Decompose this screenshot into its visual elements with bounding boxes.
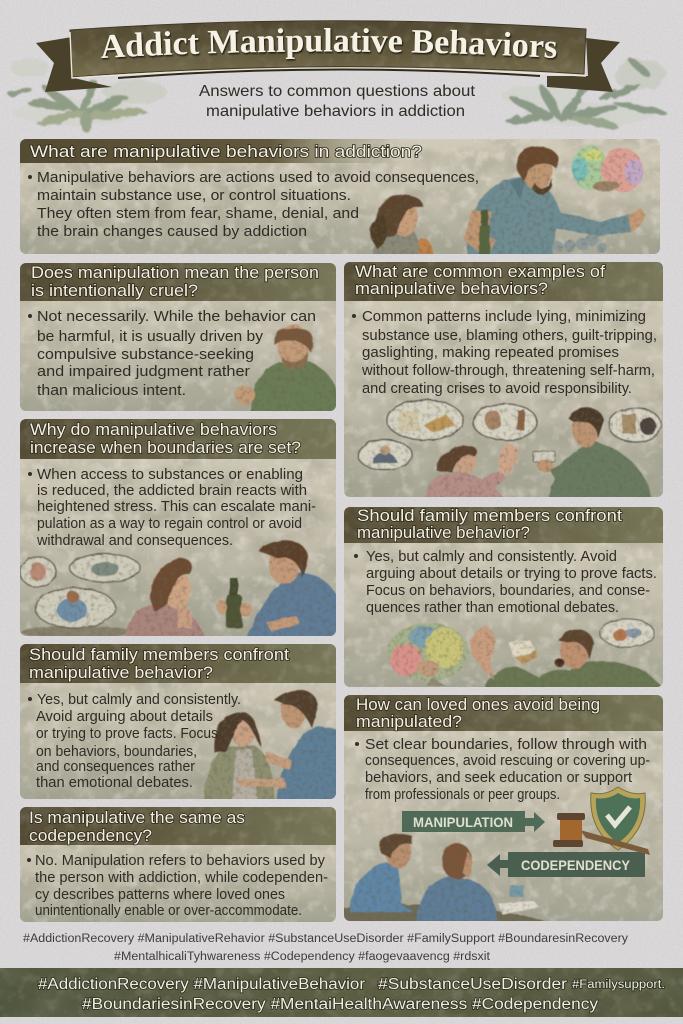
body text: pulation as a way to regain control or avoid [37,516,302,532]
icon: gavel [553,813,650,855]
illustration: two men watching [344,833,546,921]
subtitle [199,83,476,120]
panel: boundaries are set [20,419,340,640]
panel: common examples [344,262,663,502]
hashtags: plain lines: #AddictionRecovery #ManipulativeRehavior #SubstanceUseDisorder #FamilySupport #BoundaresinRecovery [23,933,628,945]
header: manipulative behavior? [357,523,530,542]
body text: Set clear boundaries, follow through with [365,737,647,753]
body text: Yes, but calmly and consistently. Avoid [366,549,617,565]
header: is intentionally cruel? [31,281,198,300]
header: What are manipulative behaviors in addiction? [30,142,422,161]
body text [27,853,328,919]
panel: codependency [20,807,336,922]
body text [352,309,657,397]
tag: codependency [487,852,645,877]
body text: Not necessarily. While the behavior can [37,309,316,325]
body text: Yes, but calmly and consistently. [37,692,241,708]
header: manipulative behavior? [29,663,213,682]
foliage: left [8,59,167,132]
body text: maintain substance use, or control situations. [37,188,351,204]
header [20,139,500,163]
body text: and consequences rather [36,759,195,775]
body text: and impaired judgment rather [37,364,250,380]
header: Should family members confront [357,506,622,525]
header: What are common examples of [355,262,605,281]
bottom hashtag bar [0,968,683,1017]
body text [354,549,657,616]
body text: quences rather than emotional debates. [366,600,619,616]
header [344,506,663,543]
body text [28,309,316,399]
body text: Focus on behaviors, boundaries, and conse- [366,583,650,599]
header [20,419,336,459]
banner white edge [70,32,586,78]
tag: manipulation: MANIPULATION [413,814,513,830]
hashtags: plain lines [23,933,628,963]
body text: Common patterns include lying, minimizing [362,309,646,325]
body text: They often stem from fear, shame, denial, and [37,206,359,222]
banner right tail [547,38,620,92]
body text: on behaviors, boundaries, [36,744,197,760]
illustration: couple with bottle and thought clouds [20,540,340,640]
panel: intentionally cruel [20,263,340,416]
body text: compulsive substance-seeking [37,347,254,363]
panel: what are manipulative behaviors [20,139,660,258]
body text: the person with addiction, while codependen- [35,870,328,886]
illustration: man in green hoodie [235,324,340,416]
panel: confront (right) [344,506,668,692]
tag: manipulation [402,811,545,832]
banner left tail [36,37,112,92]
body text: and creating crises to avoid responsibility. [362,381,632,397]
title: Addict Manipulative Behaviors [101,28,558,62]
foliage: right [500,56,668,130]
bottom hashtag bar: #Familysupport. [572,979,665,991]
body text: consequences, avoid rescuing or covering up- [365,753,650,769]
header: How can loved ones avoid being [356,695,600,714]
subtitle: manipulative behaviors in addiction [206,103,465,120]
body text: be harmful, it is usually driven by [37,329,264,345]
bottom hashtag bar: #AddictionRecovery #ManipulativeBehavior [38,976,365,993]
panel: confront (left) [20,644,340,804]
body text: unintentionally enable or over-accommodate. [35,903,302,919]
header: increase when boundaries are set? [30,438,301,457]
body text: than emotional debates. [36,775,193,791]
body text: arguing about details or trying to prove facts. [366,566,657,582]
header [20,807,336,845]
bottom hashtag bar: #BoundariesinRecovery #MentaiHealthAwareness #Codependency [82,996,598,1013]
header [344,695,663,731]
illustration: brain and shouting man [387,619,668,692]
subtitle: Answers to common questions about [199,83,476,100]
body text: behaviors, and seek education or support [365,770,632,786]
icon: shield with check [591,787,645,850]
illustration: man, woman and brain [371,146,645,258]
body text: heightened stress. This can escalate mani- [37,499,316,515]
header: manipulated? [356,712,462,731]
body text: without follow-through, threatening self-harm, [361,363,655,379]
banner main band [70,21,586,77]
body text: cy describes patterns where loved ones [35,887,285,903]
header: Should family members confront [29,645,289,664]
body text: or trying to prove facts. Focus [36,726,218,742]
header: Why do manipulative behaviors [30,420,277,439]
hashtags: plain lines: #MentalhicaliTyhwareness #Codependency #faogevaavencg #rdsxit [114,951,491,963]
header [20,263,336,301]
body text [28,467,316,549]
body text: substance use, blaming others, guilt-tripping, [362,328,657,344]
header [20,644,336,683]
title banner [36,20,620,92]
body text: Manipulative behaviors are actions used to avoid consequences, [37,170,479,186]
body text [28,170,479,240]
body text: the brain changes caused by addiction [37,224,307,240]
tag: codependency: CODEPENDENCY [521,857,631,873]
body text [355,737,650,803]
body text: than malicious intent. [37,383,186,399]
header: codependency? [29,826,152,845]
body text: gaslighting, making repeated promises [362,345,619,361]
body text: from professionals or peer groups. [365,787,560,803]
illustration: man comforting woman [203,690,340,804]
body text: withdrawal and consequences. [36,533,233,549]
body text: Avoid arguing about details [36,709,213,725]
body text [28,692,241,791]
header [344,262,663,301]
header: Does manipulation mean the person [31,263,319,282]
bottom hashtag bar: #SubstanceUseDisorder [378,976,567,993]
body text: No. Manipulation refers to behaviors used by [35,853,326,869]
panel: avoid being manipulated [340,695,663,926]
body text: is reduced, the addicted brain reacts with [37,483,307,499]
illustration: arguing couple with thought bubbles [358,400,661,502]
brain [387,623,469,686]
header: manipulative behaviors? [355,279,548,298]
header: Is manipulative the same as [29,808,245,827]
body text: When access to substances or enabling [37,467,303,483]
